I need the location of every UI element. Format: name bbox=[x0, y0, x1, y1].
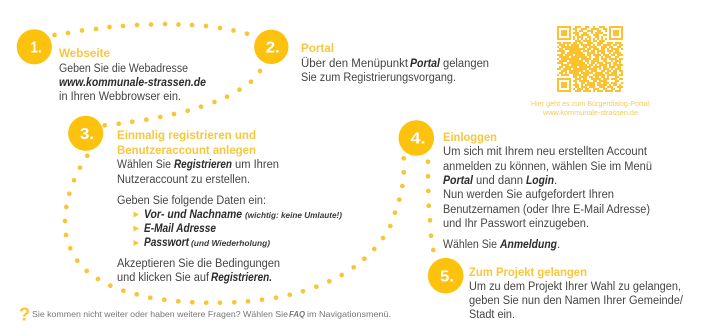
body text: Über den Menüpunkt bbox=[301, 58, 409, 70]
intro text: um Ihren bbox=[235, 159, 279, 171]
QR caption bbox=[531, 101, 651, 117]
body text: in Ihren Webbrowser ein. bbox=[59, 91, 181, 103]
body text: . bbox=[557, 239, 560, 251]
body text: anmelden zu können, wählen Sie im Menü bbox=[443, 161, 652, 173]
help text: im Navigationsmenü. bbox=[307, 309, 391, 319]
closing text bbox=[117, 258, 280, 284]
intro text: Nutzeraccount zu erstellen. bbox=[117, 174, 250, 186]
body text: Um sich mit Ihrem neu erstellten Account bbox=[443, 146, 648, 158]
badge 5 bbox=[428, 258, 464, 294]
bullet list: (wichtig: keine Umlaute!) bbox=[245, 210, 342, 220]
badge 1: 1. bbox=[30, 40, 42, 56]
step 5: Zum Projekt gelangen bbox=[428, 258, 684, 321]
body text: Anmeldung bbox=[499, 239, 557, 251]
QR caption: Hier geht es zum Bürgerdialog-Portal: bbox=[531, 101, 651, 108]
heading: Einmalig registrieren und Benutzeraccount anlegen bbox=[117, 130, 256, 157]
body text: Sie zum Registrierungsvorgang. bbox=[301, 72, 456, 84]
body text bbox=[443, 146, 652, 251]
QR caption: www.kommunale-strassen.de bbox=[542, 110, 638, 117]
heading: Webseite: Webseite bbox=[59, 48, 110, 60]
bullet list: Passwort bbox=[144, 237, 190, 249]
body text: Portal bbox=[410, 58, 441, 70]
dotted path: step 3 to step 4 bbox=[63, 153, 406, 305]
body text: gelangen bbox=[443, 58, 489, 70]
body text bbox=[469, 281, 684, 321]
body text: Geben Sie die Webadresse bbox=[59, 63, 188, 75]
badge 3 bbox=[68, 116, 103, 151]
step 3: Einmalig registrieren bbox=[68, 116, 342, 284]
help text: FAQ bbox=[289, 309, 305, 319]
heading: Portal: Portal bbox=[301, 43, 334, 55]
body text: Login bbox=[526, 175, 554, 187]
badge 2: 2. bbox=[266, 39, 280, 56]
step 2: Portal bbox=[254, 30, 489, 84]
intro text bbox=[117, 159, 279, 207]
badge 4: 4. bbox=[410, 130, 426, 148]
body text: Nun werden Sie aufgefordert Ihren bbox=[443, 189, 614, 201]
step 1: Webseite bbox=[17, 29, 207, 103]
heading: Einmalig registrieren und Benutzeraccount anlegen: Benutzeraccount anlegen bbox=[117, 145, 256, 157]
bullet list: (und Wiederholung) bbox=[191, 238, 270, 248]
bullet list: E-Mail Adresse bbox=[144, 223, 217, 235]
body text: Wählen Sie bbox=[443, 239, 497, 251]
badge 3: 3. bbox=[80, 126, 94, 143]
bullet list: Vor- und Nachname bbox=[144, 209, 243, 221]
help note bbox=[19, 304, 391, 324]
closing text: Akzeptieren Sie die Bedingungen bbox=[117, 258, 280, 270]
body text bbox=[59, 63, 207, 103]
body text: Benutzernamen (oder Ihre E-Mail Adresse) bbox=[443, 204, 650, 216]
intro text: Wählen Sie bbox=[117, 159, 171, 171]
body text: Portal bbox=[443, 175, 474, 187]
body text: und dann bbox=[476, 175, 523, 187]
body text: www.kommunale-strassen.de bbox=[59, 77, 207, 89]
badge 5: 5. bbox=[440, 268, 454, 286]
body text: geben Sie nun den Namen Ihrer Gemeinde/ bbox=[469, 295, 684, 307]
body text bbox=[301, 58, 489, 84]
dotted path: step 4 to step 5 bbox=[426, 159, 436, 252]
icon: question mark: ? bbox=[19, 304, 30, 324]
closing text: Registrieren. bbox=[211, 272, 272, 284]
badge 4 bbox=[398, 120, 434, 156]
intro text: Geben Sie folgende Daten ein: bbox=[117, 195, 266, 207]
closing text: und klicken Sie auf bbox=[117, 272, 210, 284]
heading: Einloggen: Einloggen bbox=[443, 132, 497, 144]
heading: Zum Projekt gelangen: Zum Projekt gelangen bbox=[469, 267, 587, 279]
bullet list bbox=[134, 209, 342, 249]
heading: Einmalig registrieren und Benutzeraccount anlegen: Einmalig registrieren und bbox=[117, 130, 256, 142]
body text: Stadt ein. bbox=[469, 309, 515, 321]
body text: Um zu dem Projekt Ihrer Wahl zu gelangen, bbox=[469, 281, 681, 293]
dotted path: step 2 to step 3 bbox=[102, 69, 262, 128]
help text: Sie kommen nicht weiter oder haben weitere Fragen? Wählen Sie bbox=[32, 309, 288, 319]
step 4: Einloggen bbox=[398, 120, 652, 251]
intro text: Registrieren bbox=[174, 159, 232, 171]
body text: und Ihr Passwort einzugeben. bbox=[443, 218, 589, 230]
body text: . bbox=[554, 175, 557, 187]
help text bbox=[32, 309, 391, 319]
badge 2 bbox=[254, 30, 288, 64]
QR code bbox=[557, 27, 623, 91]
dotted path: step 1 to step 2 bbox=[52, 22, 249, 37]
badge 1 bbox=[17, 29, 52, 64]
